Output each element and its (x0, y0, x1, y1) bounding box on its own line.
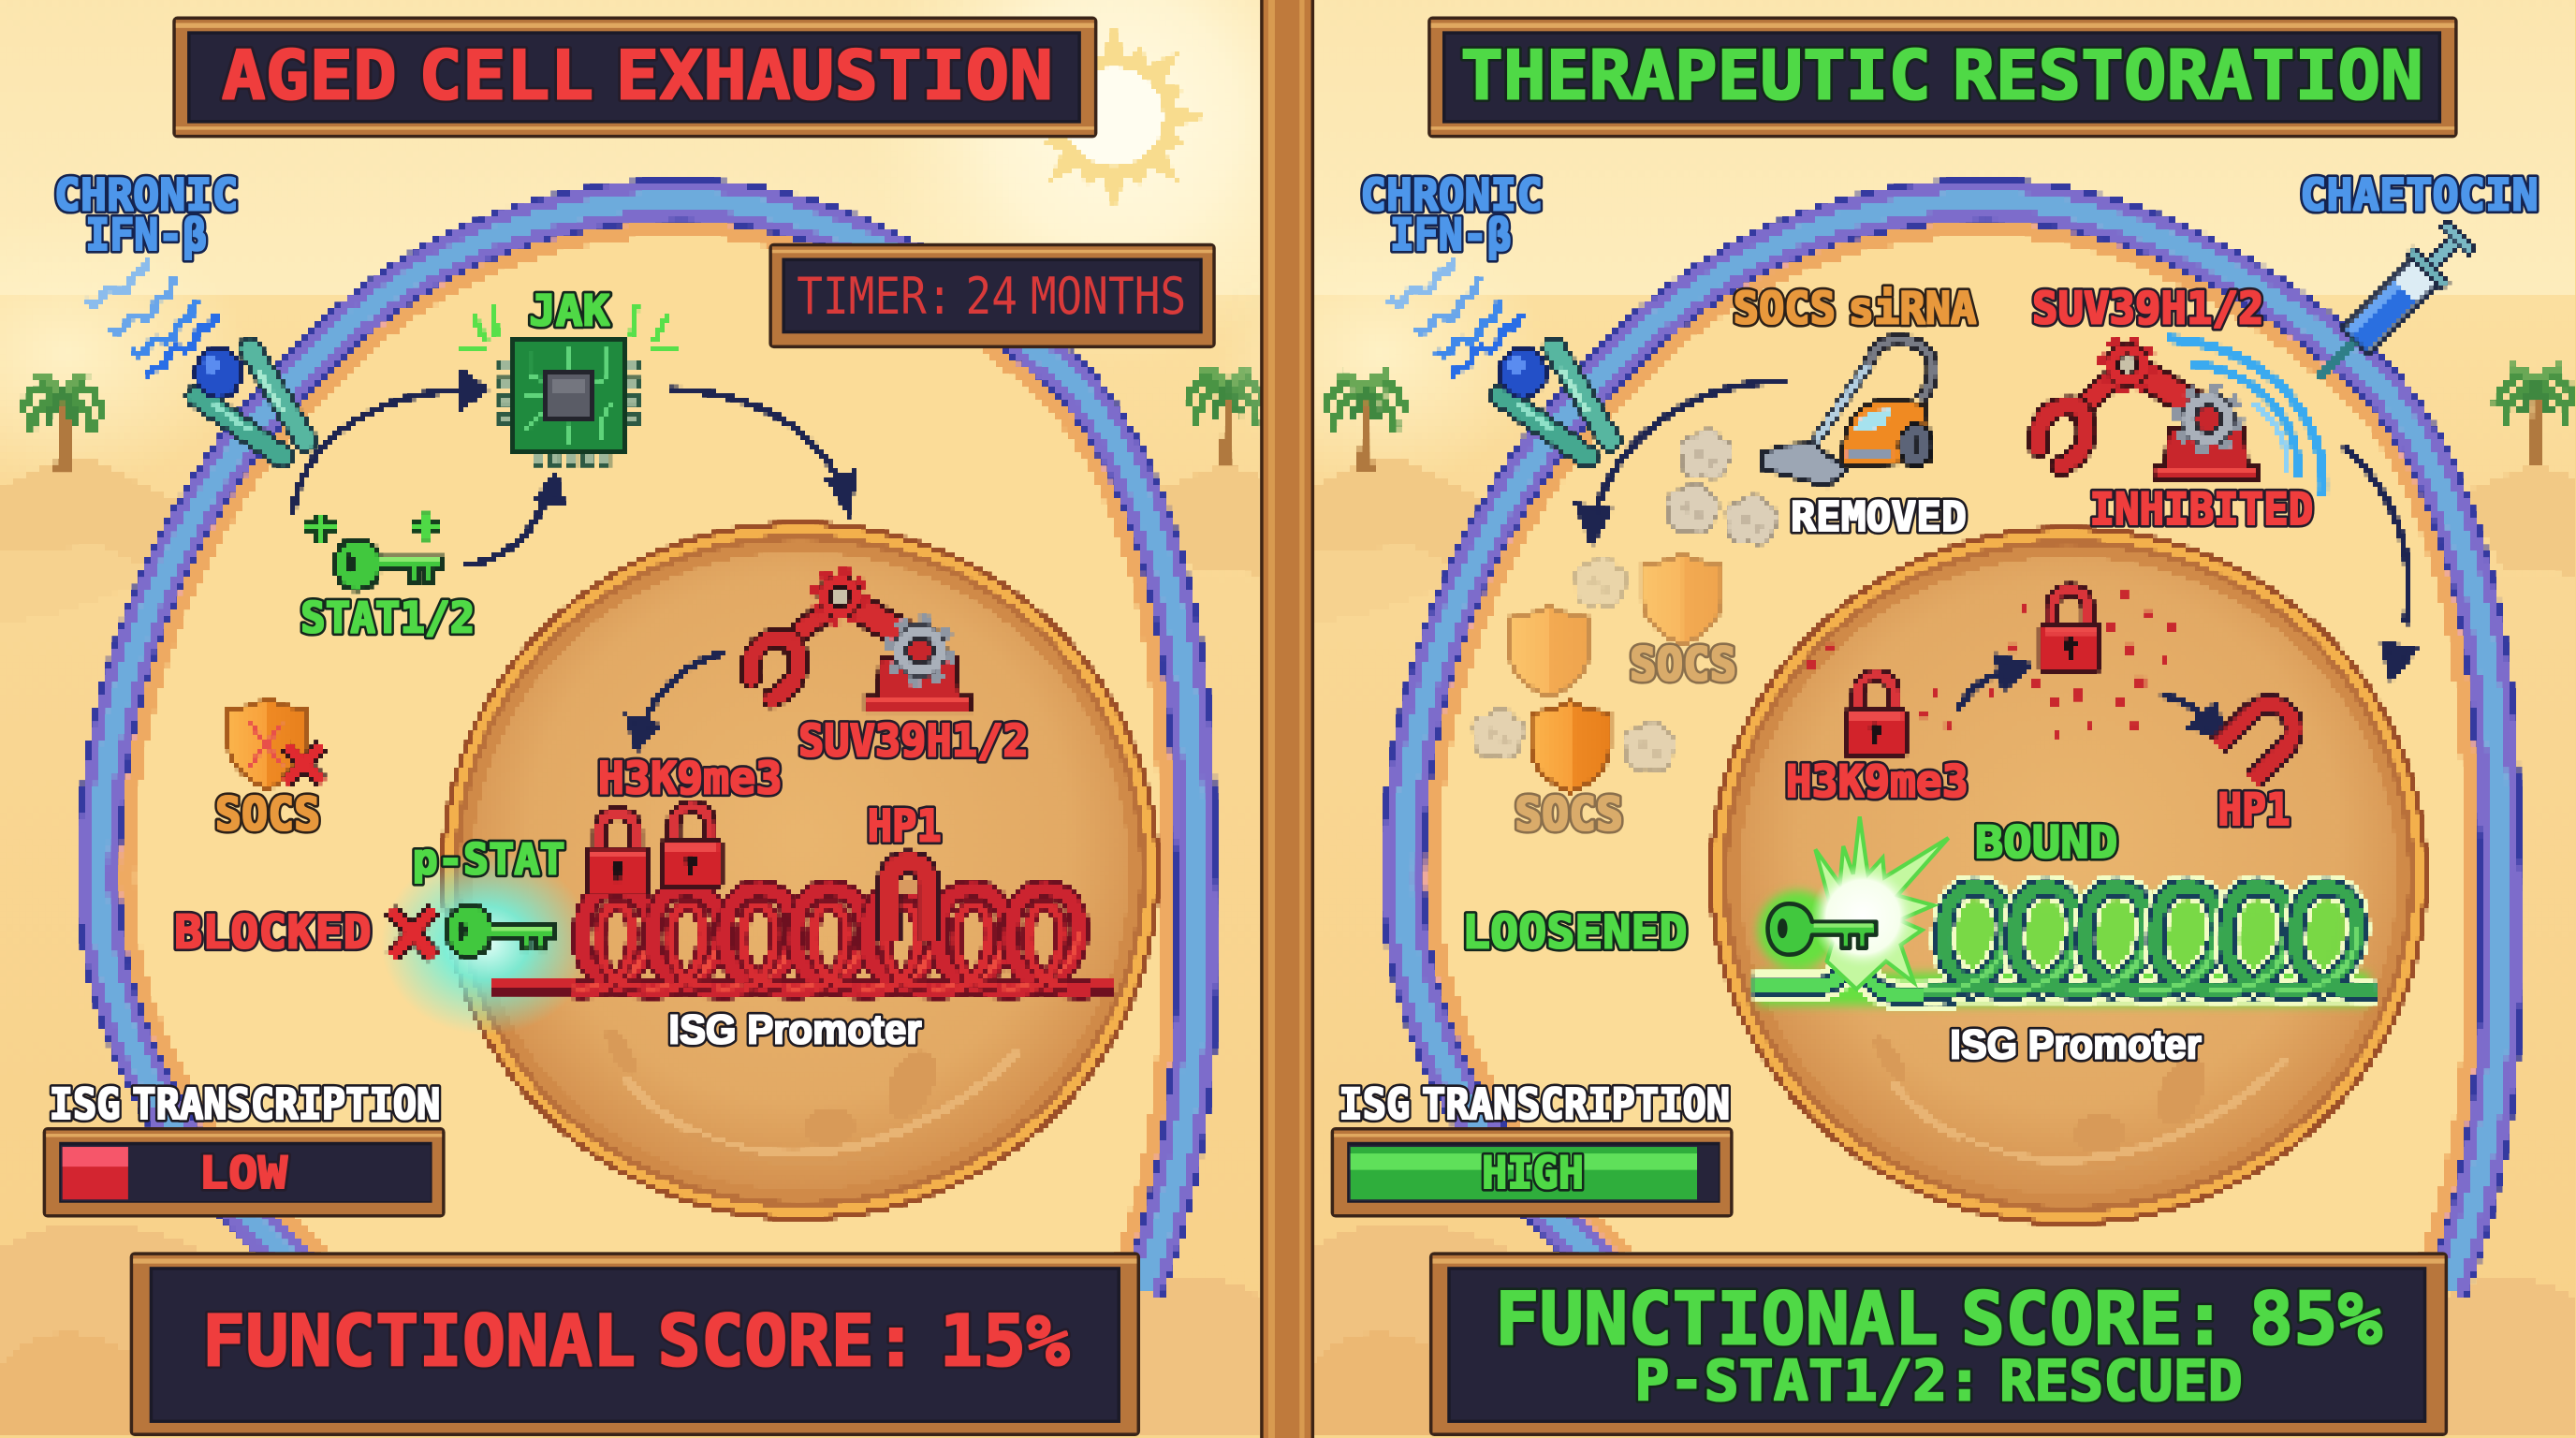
frame: title panel (172, 17, 1097, 138)
frame: ISG transcription bar (43, 1127, 446, 1218)
label: JAK: JAK (529, 286, 610, 336)
label: blocked: BLOCKED (174, 905, 372, 960)
functional score: FUNCTIONAL SCORE: 15% (202, 1299, 1070, 1382)
arrow: lock to lock (1958, 657, 2027, 710)
icon: blocked X (391, 910, 433, 956)
label: ISG transcription: ISG TRANSCRIPTION (1339, 1079, 1730, 1129)
cell with membrane (98, 200, 1197, 1438)
label: IFN-β: IFN-β (85, 210, 207, 261)
glow around green DNA and key (1758, 903, 2369, 990)
icon: STAT key with plus signs (305, 513, 444, 590)
label: SOCS: SOCS (1515, 786, 1623, 841)
icon: chaetocin syringe (2301, 217, 2479, 395)
bar value: low: LOW (198, 1148, 288, 1199)
rescued status: P-STAT1/2: RESCUED (1634, 1349, 2243, 1414)
arrow: lock to HP1 (2160, 695, 2224, 738)
label: inhibited: INHIBITED (2089, 484, 2313, 536)
label: SUV39H1/2: SUV39H1/2 (2032, 284, 2264, 335)
icon: receptor (1500, 348, 1610, 457)
label: removed: REMOVED (1791, 493, 1967, 541)
label: H3K9me3: H3K9me3 (1786, 756, 1969, 808)
panel: aged cell exhaustion (left) (0, 0, 1360, 1438)
glow behind blocked p-STAT key (381, 851, 592, 1035)
label: SOCS siRNA: SOCS siRNA (1734, 284, 1976, 335)
label: ISG transcription: ISG TRANSCRIPTION (50, 1079, 440, 1129)
title: AGED CELL EXHAUSTION (222, 36, 1053, 114)
label: ISG promoter: ISG Promoter (1950, 1021, 2202, 1067)
label: IFN-β: IFN-β (1390, 210, 1512, 261)
nucleus (440, 521, 1160, 1221)
chart: open green DNA coil (1753, 888, 2376, 996)
functional score: FUNCTIONAL SCORE: 85% (1495, 1278, 2382, 1362)
nucleus (1708, 526, 2428, 1225)
arrow: siRNA to SOCS (1579, 381, 1786, 540)
icon: receptor (196, 348, 305, 457)
icons and arrows (85, 259, 1114, 990)
timer readout: TIMER: 24 MONTHS (797, 267, 1186, 326)
cell with membrane (1403, 200, 2501, 1438)
arrow: JAK to nucleus (668, 389, 855, 509)
label: SOCS: SOCS (215, 786, 320, 841)
panel: therapeutic restoration (right) (1216, 0, 2576, 1438)
bar value: high: HIGH (1482, 1148, 1584, 1199)
center wooden divider (1260, 0, 1314, 1438)
icon: vacuum cleaner (1761, 340, 1933, 487)
label: STAT1/2: STAT1/2 (300, 594, 475, 643)
label: p-STAT: p-STAT (413, 835, 565, 885)
title: THERAPEUTIC RESTORATION (1460, 36, 2423, 114)
icon: interferon waves (1390, 259, 1523, 376)
arrow: chaetocin to nucleus (2343, 447, 2413, 677)
desert background (1216, 0, 2576, 1438)
frame: ISG transcription bar (1331, 1127, 1734, 1218)
label: HP1: HP1 (2217, 785, 2291, 836)
icon: SUV39H1/2 robot arm (inhibited) (2039, 342, 2259, 479)
label: chronic: CHRONIC (1360, 170, 1543, 222)
icons and arrows (1390, 217, 2479, 792)
arrow: robot arm to H3K9me3 (629, 653, 726, 748)
label: chronic: CHRONIC (54, 170, 238, 222)
icon: dissolving locks (1847, 590, 2100, 756)
arrow: STAT to JAK (461, 477, 562, 565)
icon: dust clouds (1473, 430, 1778, 771)
arrow: receptor to JAK (292, 373, 485, 516)
label: SUV39H1/2: SUV39H1/2 (798, 715, 1029, 767)
label: chaetocin: CHAETOCIN (2300, 170, 2539, 222)
frame: functional score panel (1429, 1252, 2448, 1436)
desert background (0, 0, 1360, 1438)
chart: condensed red DNA coil (493, 889, 1114, 990)
icon: SOCS shields (1510, 553, 1721, 792)
icon: SUV39H1/2 robot arm (751, 574, 971, 712)
icon: HP1 magnet (889, 862, 929, 940)
frame: timer panel (768, 243, 1216, 348)
label: H3K9me3: H3K9me3 (598, 754, 782, 805)
icon: p-STAT key (446, 905, 555, 956)
icon: binding starburst and key (1767, 816, 1949, 990)
icon: H3K9me3 padlocks (588, 807, 721, 894)
frame: title panel (1427, 17, 2458, 138)
labels (50, 36, 1186, 1382)
icon: disabled SOCS shield (228, 698, 322, 788)
icon: interferon waves (85, 259, 218, 376)
icon: sun (1020, 23, 1208, 211)
icon: JAK chip with sparks (460, 304, 677, 465)
label: bound: BOUND (1975, 817, 2117, 869)
frame: functional score panel (130, 1252, 1140, 1436)
label: SOCS faded: SOCS (1630, 638, 1736, 692)
icon: red debris (1808, 592, 2177, 738)
icon: released HP1 magnet (2217, 695, 2304, 781)
label: loosened: LOOSENED (1462, 905, 1687, 960)
icon: inhibition waves (2167, 339, 2323, 496)
labels (1339, 36, 2539, 1414)
label: ISG promoter: ISG Promoter (668, 1006, 922, 1052)
label: HP1: HP1 (868, 801, 942, 853)
